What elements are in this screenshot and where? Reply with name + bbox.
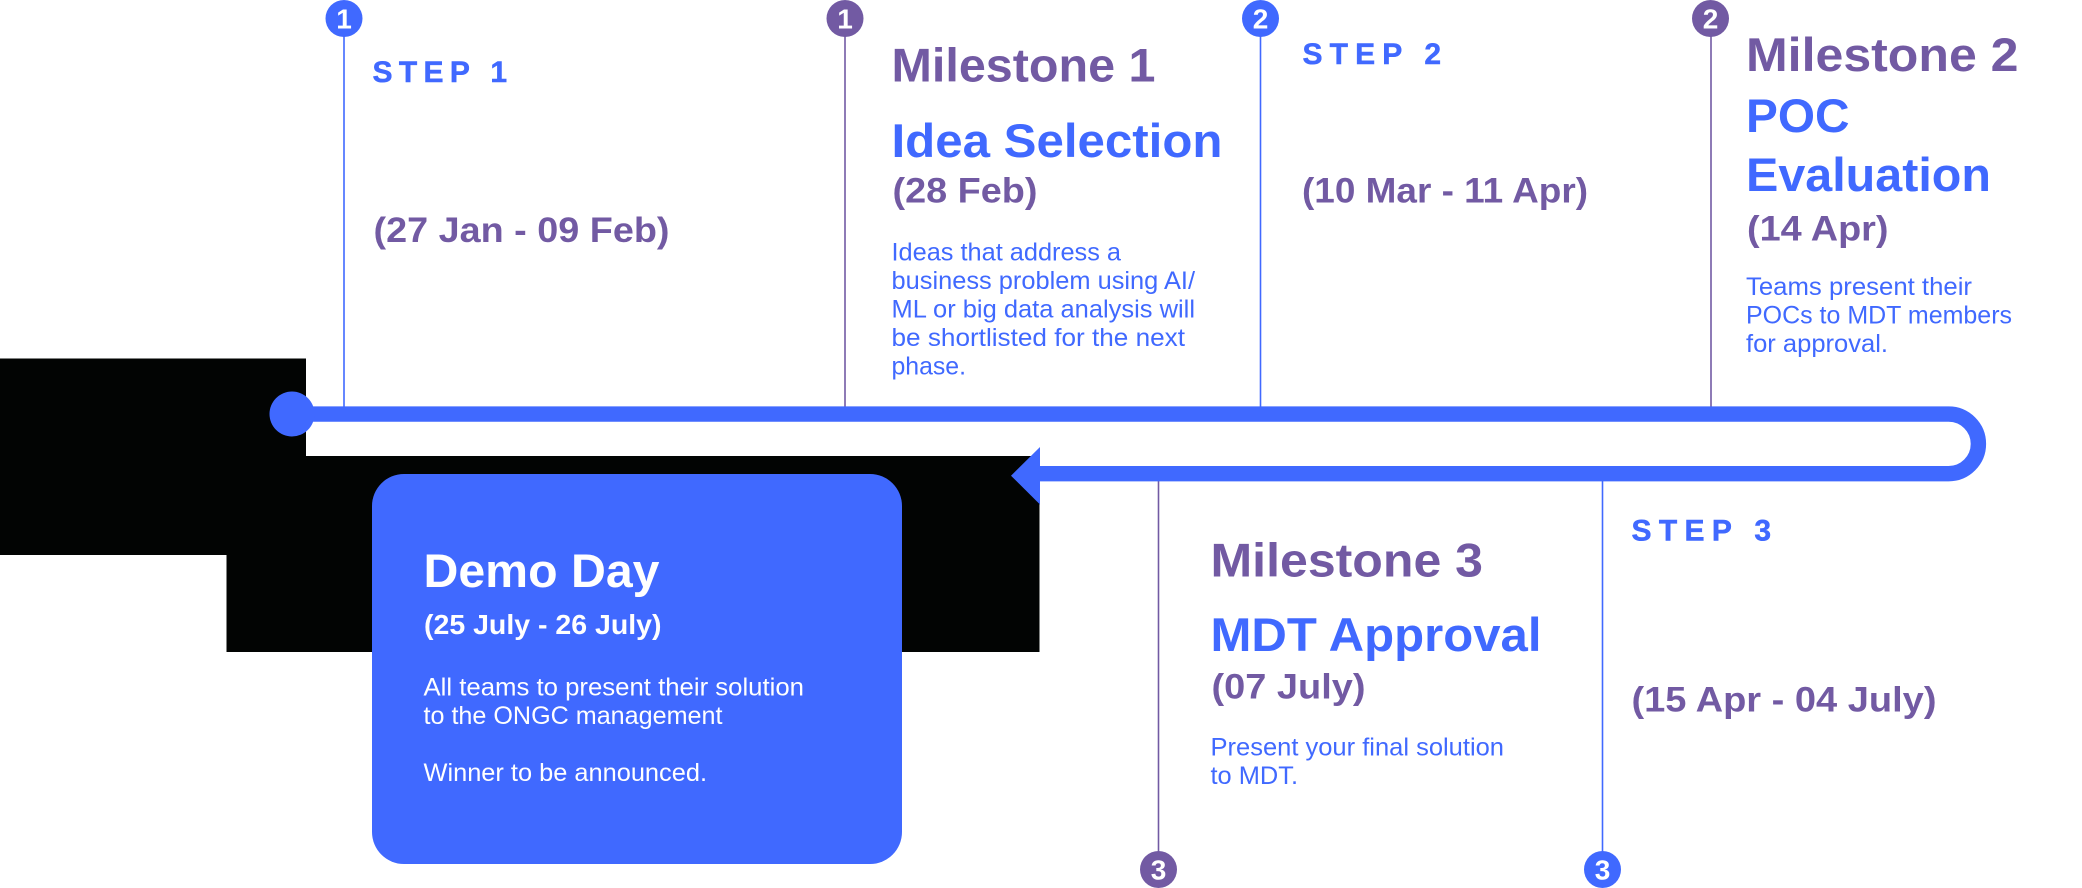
demo day description: Winner to be announced. — [424, 759, 707, 787]
step 3 connector: 3 — [1595, 854, 1610, 886]
milestone 2 text: (14 Apr) — [1747, 208, 1888, 248]
milestone 1 connector: 1 — [837, 4, 853, 34]
milestone 3 text — [1210, 534, 1542, 790]
milestone 2 text: Evaluation — [1746, 148, 1991, 201]
demo day description: All teams to present their solution — [424, 674, 804, 702]
milestone 1 text — [892, 38, 1222, 380]
step 3 connector — [1584, 480, 1621, 888]
milestone 3 text: Milestone 3 — [1210, 534, 1483, 586]
step 3 text — [1632, 514, 1936, 720]
demo day dates: (25 July - 26 July) — [424, 609, 662, 640]
step 1 text: STEP 1 — [372, 56, 507, 89]
milestone 2 text: for approval. — [1746, 330, 1888, 358]
panel: demo day card — [372, 474, 902, 864]
milestone 1 text: Milestone 1 — [892, 38, 1156, 92]
milestone 3 connector — [1140, 480, 1177, 888]
step 1 connector — [326, 0, 362, 407]
step 1 text: (27 Jan - 09 Feb) — [374, 210, 670, 250]
milestone 1 text: (28 Feb) — [892, 170, 1038, 210]
milestone 1 text: ML or big data analysis will — [892, 296, 1195, 324]
milestone 2 text: POCs to MDT members — [1746, 302, 2012, 330]
milestone 3 text: to MDT. — [1210, 762, 1298, 790]
step 3 text: (15 Apr - 04 July) — [1632, 680, 1936, 720]
milestone 1 text: business problem using AI/ — [892, 267, 1195, 295]
timeline track — [292, 414, 1978, 474]
step 2 text: STEP 2 — [1302, 38, 1441, 71]
timeline start dot — [270, 392, 314, 436]
step 2 text — [1302, 38, 1588, 210]
demo day description — [424, 674, 804, 787]
milestone 2 text: POC — [1746, 89, 1850, 142]
milestone 3 text: (07 July) — [1212, 666, 1366, 706]
milestone 2 text — [1746, 28, 2018, 358]
milestone 3 text: Present your final solution — [1210, 734, 1504, 762]
milestone 2 text: Milestone 2 — [1746, 28, 2018, 81]
milestone 1 text: Idea Selection — [892, 114, 1222, 167]
milestone 1 text: Ideas that address a — [892, 238, 1121, 266]
step 1 connector: 1 — [336, 4, 352, 34]
black background block — [0, 358, 1040, 652]
milestone 2 connector: 2 — [1703, 4, 1718, 34]
demo day description: to the ONGC management — [424, 702, 723, 730]
milestone 3 connector: 3 — [1151, 854, 1166, 886]
milestone 1 connector — [826, 0, 864, 407]
timeline arrowhead — [1011, 447, 1040, 504]
step 2 text: (10 Mar - 11 Apr) — [1302, 170, 1588, 210]
milestone 1 text: be shortlisted for the next — [892, 324, 1185, 352]
step 3 text: STEP 3 — [1632, 514, 1771, 548]
demo day heading: Demo Day — [424, 544, 660, 597]
step 1 text — [372, 56, 670, 250]
milestone 2 text: Teams present their — [1746, 273, 1972, 301]
milestone 3 text: MDT Approval — [1210, 608, 1542, 661]
step 2 connector: 2 — [1253, 4, 1268, 34]
milestone 2 connector — [1692, 0, 1729, 407]
step 2 connector — [1242, 0, 1279, 407]
milestone 1 text: phase. — [892, 352, 966, 380]
